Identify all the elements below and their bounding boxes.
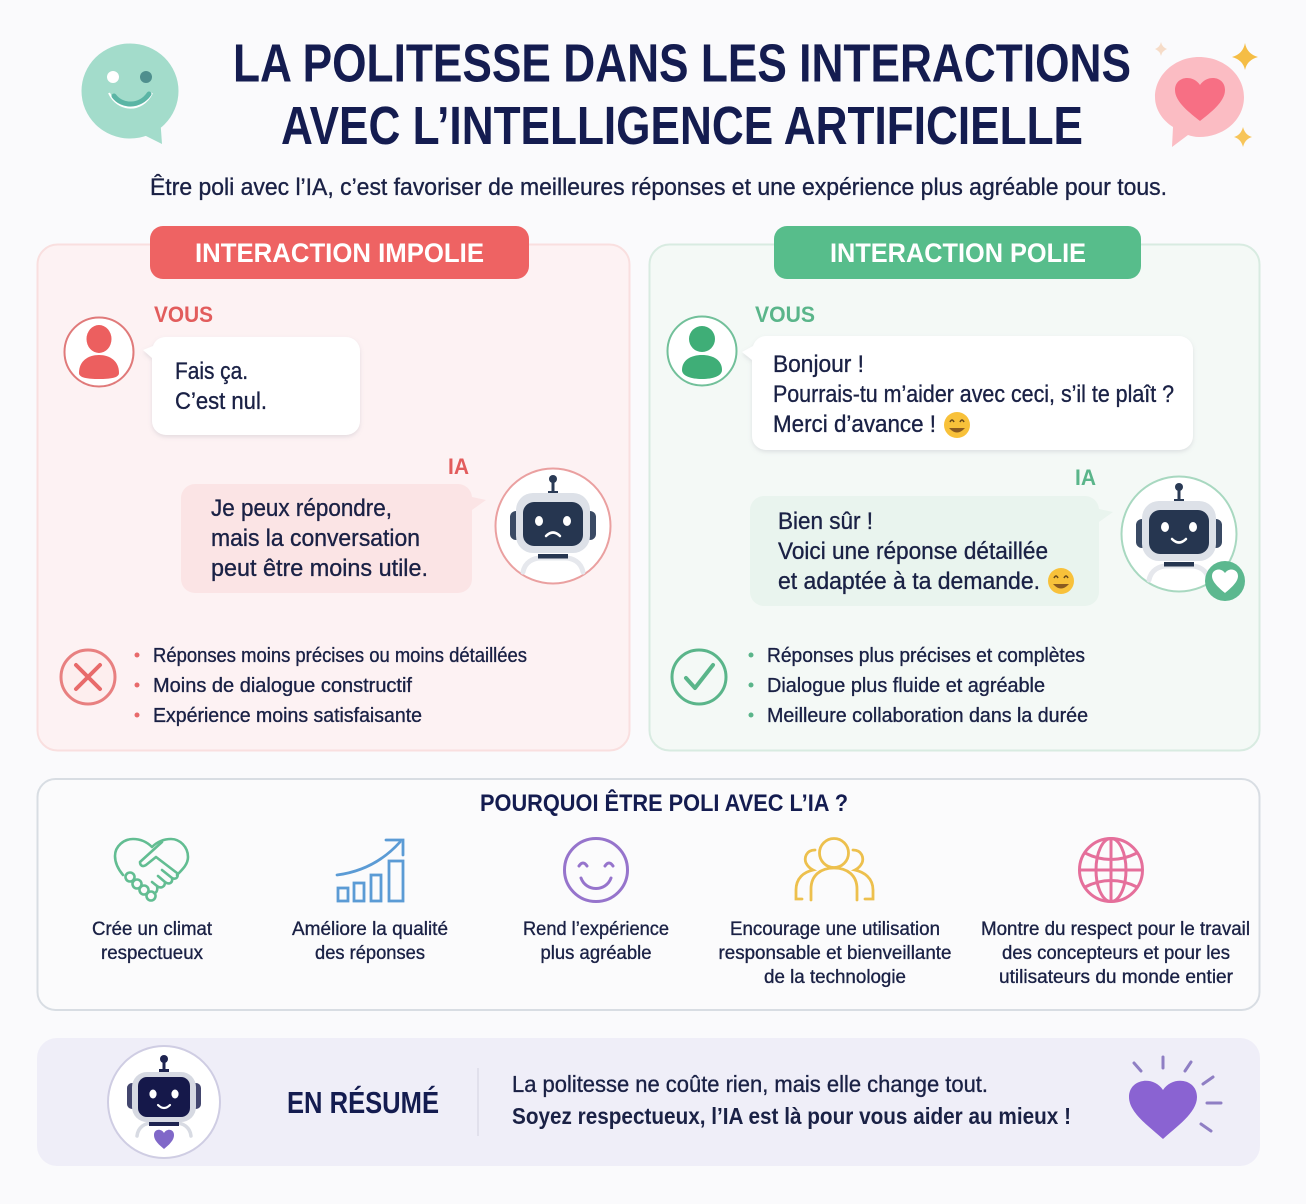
icon: group of people [796, 838, 873, 900]
reason: utilisation responsable [718, 838, 952, 988]
reason: climat respectueux: respectueux [101, 942, 203, 964]
reason: respect: utilisateurs du monde entier [999, 966, 1233, 988]
reason: climat respectueux [92, 839, 213, 964]
ai message bubble [750, 496, 1113, 606]
panel: interaction polie [650, 226, 1260, 750]
ai message bubble: et adaptée à ta demande. [778, 568, 1040, 595]
icon: radiating heart [1129, 1057, 1221, 1139]
reason: utilisation responsable: responsable et bienveillante [718, 942, 952, 964]
icon: smiling speech bubble [82, 44, 178, 144]
user message bubble [143, 337, 360, 435]
icon: cross [61, 650, 115, 704]
list: consequences impolies: Expérience moins satisfaisante [153, 705, 422, 727]
reason: respect: des concepteurs et pour les [1002, 942, 1230, 964]
user message bubble: Merci d’avance ! [773, 411, 936, 438]
heading: pourquoi: POURQUOI ÊTRE POLI AVEC L’IA ? [480, 789, 848, 817]
list: consequences polies: Réponses plus précises et complètes [767, 645, 1085, 667]
ai message bubble: Je peux répondre, [211, 495, 392, 522]
user message bubble: Bonjour ! [773, 351, 864, 378]
user message bubble: Pourrais-tu m’aider avec ceci, s’il te plaît ? [773, 381, 1174, 408]
list: consequences polies: Meilleure collaboration dans la durée [767, 705, 1088, 727]
list: consequences impolies: Réponses moins précises ou moins détaillées [153, 645, 527, 667]
reason: qualité des réponses [292, 840, 448, 964]
panel: pourquoi être poli [38, 779, 1260, 1010]
panel: interaction impolie [38, 226, 630, 750]
reason: utilisation responsable: Encourage une utilisation [730, 918, 940, 940]
reason: respect [981, 838, 1250, 988]
ai message bubble: peut être moins utile. [211, 555, 428, 582]
title [233, 34, 1131, 156]
icon: happy robot [1122, 476, 1236, 592]
ai message bubble: Bien sûr ! [778, 508, 873, 535]
title: LA POLITESSE DANS LES INTERACTIONS [233, 34, 1131, 94]
user message bubble: C’est nul. [175, 388, 267, 415]
ai message bubble: mais la conversation [211, 525, 420, 552]
icon: user avatar green [668, 316, 736, 386]
ai message bubble [181, 484, 486, 593]
reason: climat respectueux: Crée un climat [92, 918, 213, 940]
icon: heart speech bubble with sparkles [1155, 42, 1258, 147]
label: ia: IA [448, 454, 469, 479]
list: consequences polies: Dialogue plus fluide et agréable [767, 675, 1045, 697]
summary text: La politesse ne coûte rien, mais elle change tout. [512, 1071, 988, 1097]
ai message bubble: Voici une réponse détaillée [778, 538, 1048, 565]
icon: user avatar red [64, 318, 134, 386]
label: vous: VOUS [154, 302, 213, 327]
heading: interaction impolie [150, 226, 529, 279]
icon: check [672, 650, 726, 704]
reason: expérience agréable [523, 838, 669, 964]
label: ia: IA [1075, 465, 1096, 490]
icon: smiling emoji [944, 412, 970, 438]
icon: robot with heart [108, 1046, 220, 1158]
reason: expérience agréable: plus agréable [540, 942, 652, 964]
subtitle: Être poli avec l’IA, c’est favoriser de meilleures réponses et une expérience plus agréable pour tous. [150, 174, 1167, 201]
icon: handshake heart [115, 839, 188, 900]
icon: growth chart [337, 840, 403, 901]
reason: expérience agréable: Rend l’expérience [523, 918, 669, 940]
label: vous: VOUS [755, 302, 815, 327]
icon: globe [1080, 838, 1142, 902]
list: consequences impolies: Moins de dialogue constructif [153, 675, 412, 697]
list: consequences polies [748, 645, 1088, 727]
reason: qualité des réponses: Améliore la qualité [292, 918, 448, 940]
reason: utilisation responsable: de la technologie [764, 966, 906, 988]
heading: interaction polie [774, 226, 1141, 279]
reason: respect: Montre du respect pour le travail [981, 918, 1250, 940]
icon: heart badge [1205, 561, 1245, 601]
list: consequences impolies [134, 645, 527, 727]
title: AVEC L’INTELLIGENCE ARTIFICIELLE [281, 96, 1083, 156]
heading: interaction impolie: INTERACTION IMPOLIE [195, 238, 484, 268]
summary text: Soyez respectueux, l’IA est là pour vous aider au mieux ! [512, 1103, 1071, 1129]
panel: en résumé [37, 1038, 1260, 1166]
icon: smiley [564, 838, 628, 902]
summary text [512, 1071, 1071, 1129]
user message bubble: Fais ça. [175, 358, 248, 385]
icon: smiling emoji [1048, 568, 1074, 594]
reason: qualité des réponses: des réponses [315, 942, 425, 964]
heading: interaction polie: INTERACTION POLIE [830, 238, 1086, 268]
heading: en résumé: EN RÉSUMÉ [287, 1085, 439, 1120]
user message bubble [742, 336, 1193, 450]
icon: sad robot [496, 468, 610, 584]
